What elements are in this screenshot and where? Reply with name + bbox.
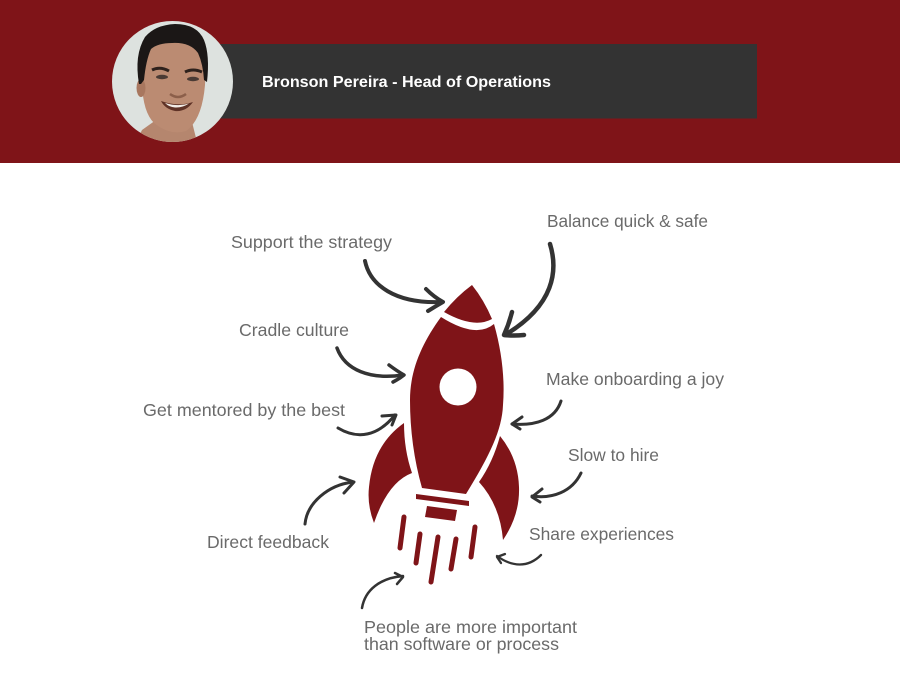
label: Slow to hire: Slow to hire	[568, 445, 659, 465]
left fin	[369, 423, 412, 523]
label: Get mentored by the best: Get mentored by the best	[143, 400, 345, 420]
arrow: Share experiences	[497, 554, 541, 564]
rocket illustration	[369, 285, 519, 582]
arrow: Get mentored by the best	[338, 415, 396, 435]
label: Support the strategy: Support the strategy	[231, 232, 392, 252]
exhaust flames	[400, 517, 475, 582]
name bar	[220, 44, 757, 118]
right fin	[479, 436, 519, 540]
rocket body	[410, 317, 504, 494]
arrow: Slow to hire	[532, 473, 581, 502]
header band	[0, 0, 900, 163]
arrow: People	[362, 573, 403, 608]
arrow: Balance quick & safe	[504, 244, 553, 336]
rocket window	[440, 368, 476, 406]
arrow: Direct feedback	[305, 477, 354, 524]
label: Share experiences: Share experiences	[529, 524, 674, 544]
label: People are more important than software or process: than software or process	[364, 634, 559, 654]
arrow: Make onboarding a joy	[512, 401, 561, 429]
engine plate	[416, 494, 469, 506]
rocket nose cone	[444, 285, 492, 323]
label: People are more important than software or process: People are more important	[364, 617, 577, 637]
arrow: Cradle culture	[337, 348, 404, 382]
label: Direct feedback: Direct feedback	[207, 532, 329, 552]
label: Balance quick & safe: Balance quick & safe	[547, 211, 708, 231]
portrait photo	[112, 21, 233, 142]
arrow: Support the strategy	[365, 261, 443, 311]
heading: name and role: Bronson Pereira - Head of Operations	[262, 74, 551, 91]
label: Cradle culture: Cradle culture	[239, 320, 349, 340]
engine block	[425, 506, 457, 521]
label: Make onboarding a joy: Make onboarding a joy	[546, 369, 724, 389]
